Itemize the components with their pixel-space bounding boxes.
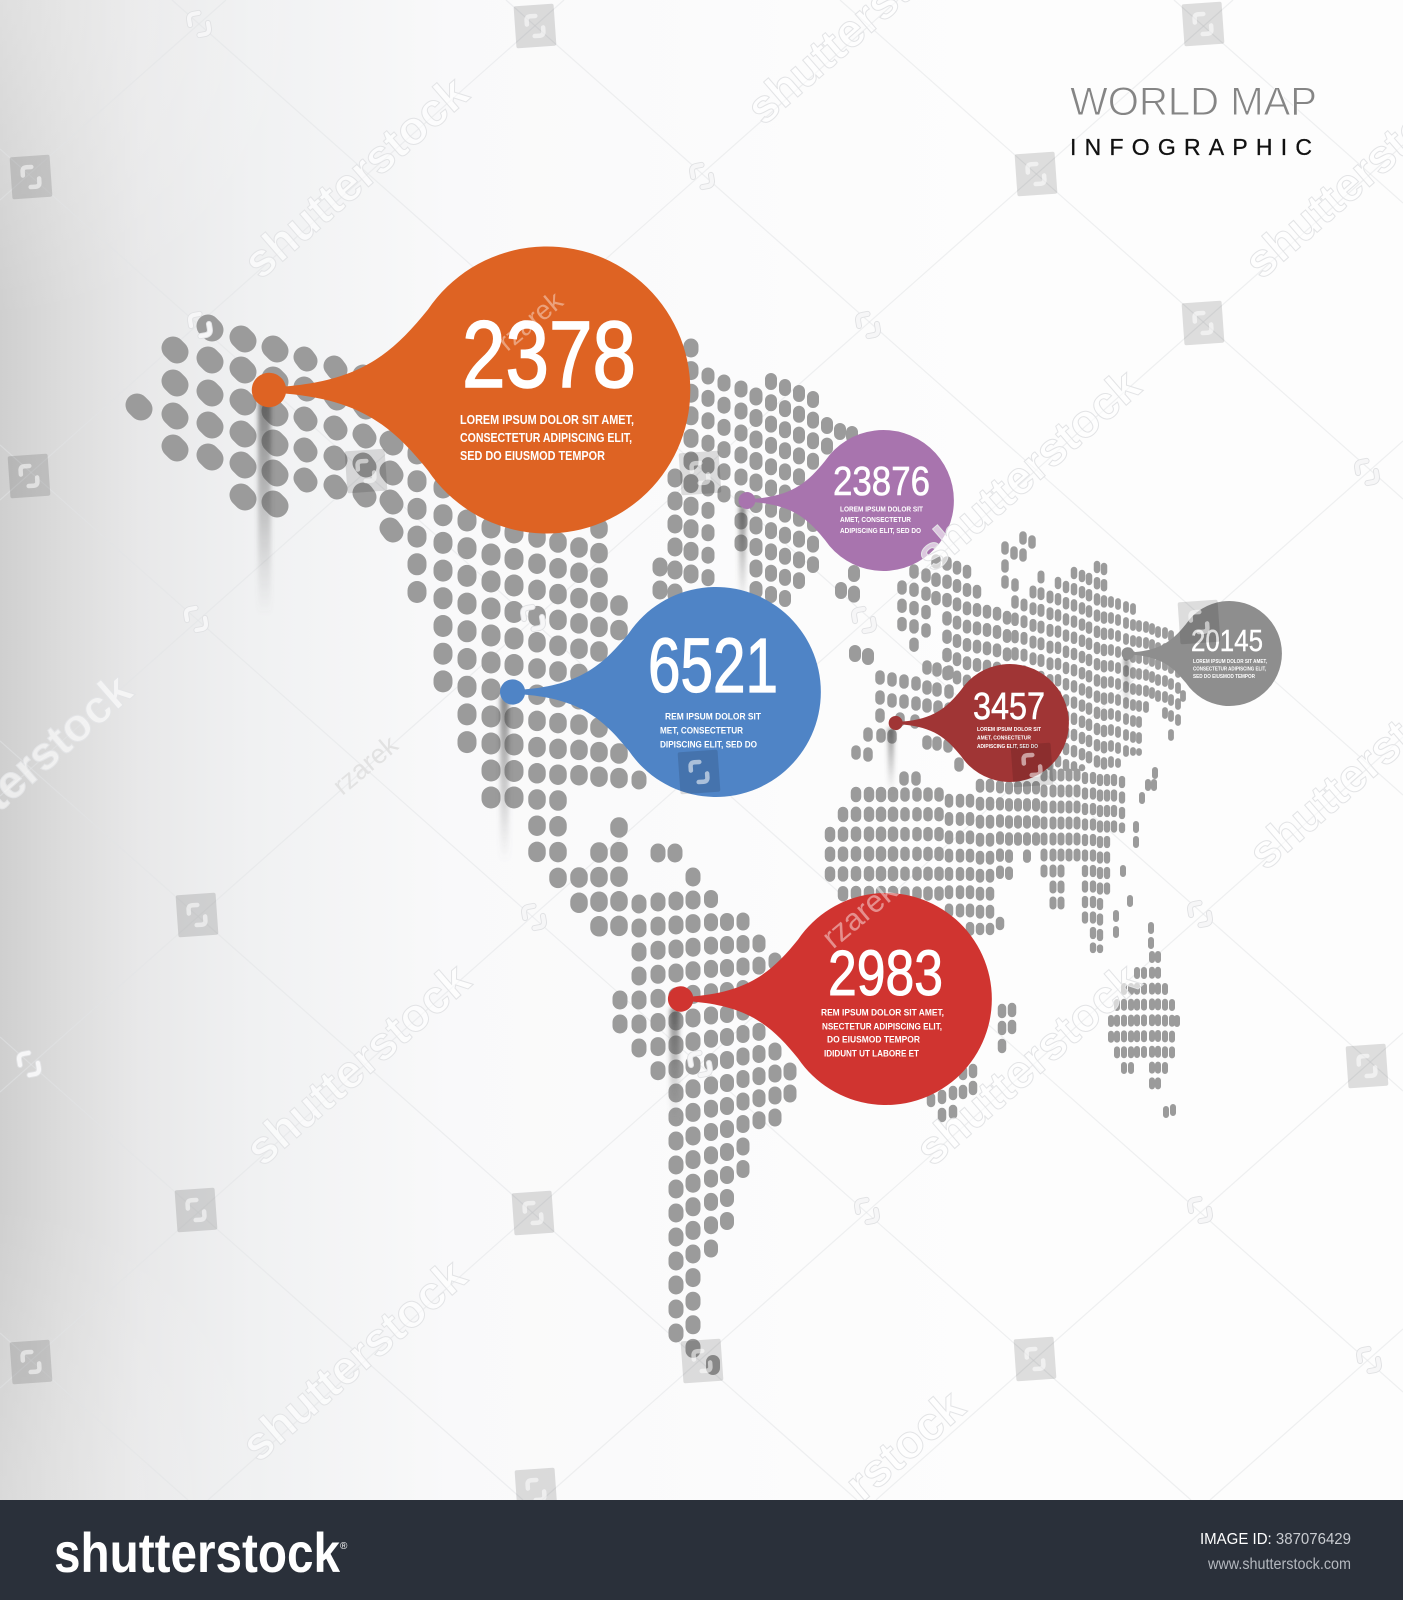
shadow: grey pin [1124, 658, 1129, 718]
shadow: purple pin [739, 506, 746, 606]
watermark text: rzarek [815, 873, 904, 955]
text: blue description: MET, CONSECTETUR [660, 726, 743, 736]
callout: grey 20145 [1121, 601, 1282, 706]
text: blue description: DIPISCING ELIT, SED DO [660, 740, 757, 750]
watermark text: rzarek [327, 729, 404, 801]
north america dots: east [600, 346, 691, 1074]
text: dark red description: LOREM IPSUM DOLOR SIT [977, 727, 1042, 733]
text: red description: NSECTETUR ADIPISCING ELIT, [822, 1022, 942, 1032]
text: purple description [840, 506, 924, 535]
watermark text: shutterstock [905, 953, 1150, 1175]
text: dark red description [977, 727, 1042, 750]
watermark text: shutterstock [905, 359, 1150, 581]
text: grey description: LOREM IPSUM DOLOR SIT AMET, [1193, 659, 1268, 665]
australia dots [1111, 954, 1177, 1090]
shadow: blue pin [500, 696, 509, 861]
text: grey description [1193, 659, 1268, 680]
shadow: red pin [670, 1008, 679, 1123]
asia dots [1024, 574, 1050, 770]
text: purple description: ADIPISCING ELIT, SED DO [840, 528, 922, 535]
number: 20145: 20145 [1191, 623, 1263, 658]
text: grey description: CONSECTETUR ADIPISCING ELIT, [1193, 666, 1267, 672]
text: purple description: LOREM IPSUM DOLOR SIT [840, 506, 924, 514]
shadow: dark red pin [888, 728, 894, 793]
text: blue description: REM IPSUM DOLOR SIT [665, 712, 761, 722]
subtitle: INFOGRAPHIC [1070, 134, 1312, 160]
watermark text: shutterstock [235, 953, 480, 1175]
number: 2983: 2983 [828, 937, 943, 1009]
number: 2378: 2378 [462, 302, 636, 408]
watermark text: shutterstock [231, 1249, 476, 1471]
callout: red 2983 [668, 893, 992, 1105]
watermark text: rzarek [492, 285, 569, 357]
shadow: orange pin [258, 400, 271, 615]
text: red description: DO EIUSMOD TEMPOR [827, 1034, 920, 1046]
callout: purple 23876 [738, 430, 954, 571]
text: purple description: AMET, CONSECTETUR [840, 517, 911, 524]
pin shadows [258, 400, 1129, 1123]
text: dark red description: AMET, CONSECTETUR [977, 736, 1031, 742]
europe dots [856, 559, 959, 781]
callout: blue 6521 [500, 587, 821, 797]
number: 6521: 6521 [648, 623, 778, 709]
footer logo: shutterstock [54, 1521, 341, 1584]
text: orange description: LOREM IPSUM DOLOR SIT AMET, [460, 413, 634, 427]
text: red description: REM IPSUM DOLOR SIT AMET, [821, 1008, 944, 1018]
number: 3457: 3457 [973, 686, 1045, 728]
watermark text: rstock [835, 1379, 974, 1510]
text: red description: IDIDUNT UT LABORE ET [824, 1048, 919, 1060]
title: WORLD MAP [1070, 80, 1317, 124]
islands dots [1116, 770, 1173, 1115]
text: blue description [660, 712, 761, 750]
number: 23876: 23876 [833, 458, 930, 504]
image id: IMAGE ID: 387076429 [1200, 1531, 1351, 1548]
north america dots: canada west [304, 357, 393, 532]
text: dark red description: ADIPISCING ELIT, SED DO [977, 744, 1039, 750]
north america dots: south and central america link [537, 527, 619, 930]
north america dots: alaska [137, 326, 277, 506]
text: red description [821, 1008, 944, 1060]
africa dots [830, 792, 893, 900]
asia dots: south and south-east [1044, 772, 1077, 908]
text: orange description [460, 413, 634, 463]
callout: orange 2378 [252, 247, 690, 534]
text: orange description: CONSECTETUR ADIPISCING ELIT, [460, 431, 632, 445]
south america dots [620, 875, 693, 1352]
footer bar [0, 1500, 1403, 1600]
dotted world map [137, 326, 1183, 1368]
text: grey description: SED DO EIUSMOD TEMPOR [1193, 674, 1255, 680]
watermark text: shutterstock [233, 66, 478, 288]
text: orange description: SED DO EIUSMOD TEMPOR [460, 449, 605, 463]
website: www.shutterstock.com [1207, 1556, 1351, 1573]
title [1070, 80, 1317, 160]
callout: dark red 3457 [889, 664, 1069, 782]
registered mark: ® [340, 1541, 348, 1552]
north america dots: central columns [417, 452, 514, 800]
